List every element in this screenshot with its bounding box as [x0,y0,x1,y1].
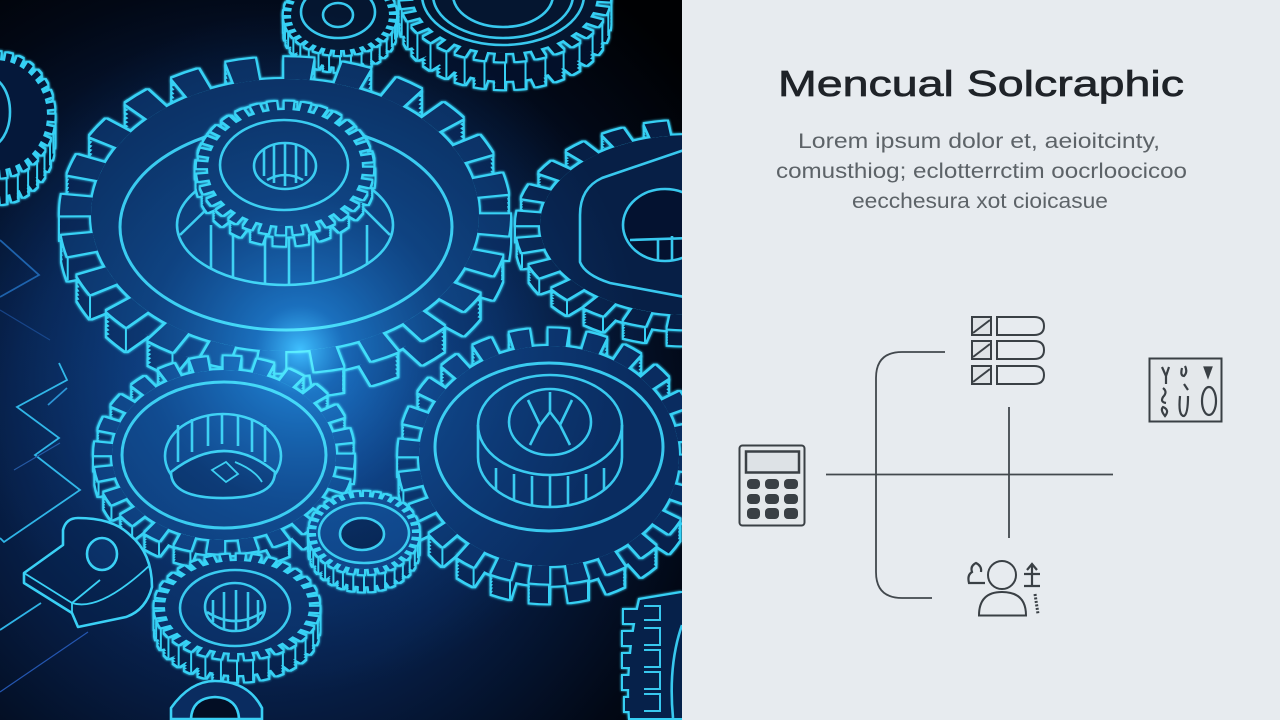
panel: text and diagram [682,0,1280,720]
gear: bottom partial ring [171,681,262,719]
zigzag circuit lines on the left [0,240,88,692]
title: Mencual Solcraphic [778,63,1184,104]
gear: lower left [99,363,349,569]
icon: symbol card [1150,358,1222,422]
gear: top right [402,0,608,89]
icon: person with symbols [968,561,1040,616]
body text: Lorem ipsum dolor et, aeioitcinty, [798,130,1160,153]
panel: glowing gears illustration [0,0,682,720]
gear: right side [512,118,682,350]
lower left gear socket [165,414,281,498]
lower right gear ring [435,363,663,531]
gear: large main [68,68,502,397]
central glow [4,47,595,646]
main gear hub small gear [202,106,368,241]
key-shaped bracket [24,518,152,627]
connector lines [826,352,1113,598]
gear: bottom small [156,558,318,682]
lower right gear hub [478,375,622,507]
body text: comusthiog; eclotterrctim oocrloocicoo [776,160,1187,183]
body text [776,130,1187,213]
gear: small centre [310,494,418,592]
lower left gear ring [122,382,326,528]
gear: top small [285,0,395,72]
icon: checklist [972,317,1044,384]
gear: top left partial [0,56,53,204]
main gear ring [120,124,452,330]
icon: calculator [740,446,804,526]
gear: lower right [403,337,695,603]
body text: eecchesura xot cioicasue [852,190,1108,213]
gear: bottom right partial [623,593,682,718]
main gear hub barrel [176,189,394,286]
